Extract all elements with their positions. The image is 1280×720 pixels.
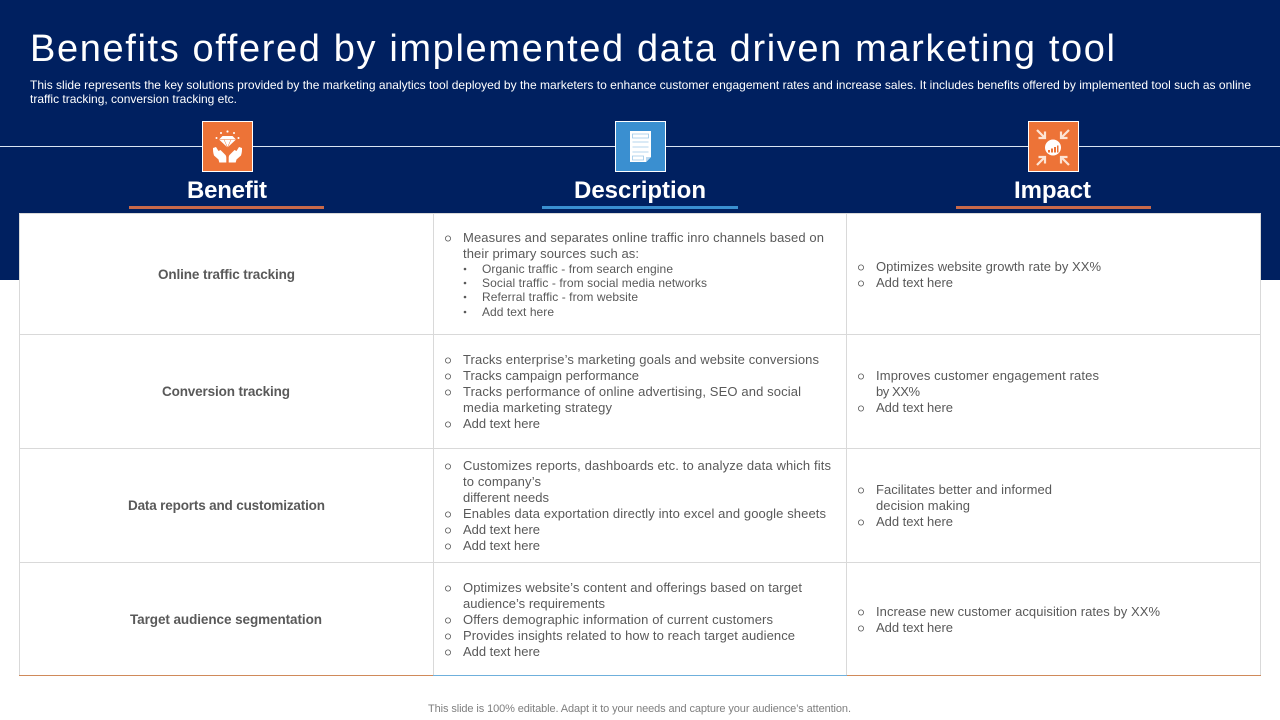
row 3: Data reports and customization: [128, 458, 1052, 553]
description list: Tracks performance of online advertising, SEO and social: [463, 384, 801, 399]
description list: Tracks campaign performance: [463, 368, 639, 383]
description list: Organic traffic - from search engine: [482, 262, 673, 276]
description list: [445, 352, 820, 431]
benefit label: Data reports and customization: [128, 498, 325, 513]
description list: Enables data exportation directly into excel and google sheets: [463, 506, 826, 521]
subtitle text block: This slide represents the key solutions provided by the marketing analytics tool deployed by the marketers to enhance customer engagement rates and increase sales. It includes benefits offered by implemented tool such as online: [30, 78, 1251, 92]
impact list: Improves customer engagement rates: [876, 368, 1100, 383]
icon: hands holding diamond: [202, 122, 252, 172]
column header: Impact: [956, 122, 1151, 209]
title: Benefits offered by implemented data driven marketing tool: [30, 28, 1115, 70]
description list: Add text here: [463, 538, 540, 553]
description list: Referral traffic - from website: [482, 290, 638, 304]
impact list: decision making: [876, 498, 970, 513]
benefit label: Target audience segmentation: [130, 612, 322, 627]
heading: Benefit: Benefit: [187, 177, 267, 204]
description list: [445, 580, 802, 659]
impact list: Optimizes website growth rate by XX%: [876, 259, 1101, 274]
description list: Optimizes website’s content and offerings based on target: [463, 580, 802, 595]
subtitle text block: traffic tracking, conversion tracking etc.: [30, 92, 237, 106]
impact list: Facilitates better and informed: [876, 482, 1052, 497]
icon: arrows converging on growth chart: [1028, 122, 1078, 172]
benefit label: Conversion tracking: [162, 384, 290, 399]
underline: Impact: [956, 206, 1151, 209]
description list: their primary sources such as:: [463, 246, 639, 261]
row 1: Online traffic tracking: [158, 230, 1101, 319]
impact list: [858, 482, 1052, 529]
description list: Add text here: [482, 305, 554, 319]
description list: media marketing strategy: [463, 400, 612, 415]
subtitle text block: [30, 78, 1251, 106]
benefit label: Online traffic tracking: [158, 267, 295, 282]
impact list: [858, 259, 1101, 290]
description list: [445, 230, 824, 319]
heading: Impact: Impact: [1014, 177, 1091, 204]
description list: Social traffic - from social media networks: [482, 276, 707, 290]
footer note: This slide is 100% editable. Adapt it to your needs and capture your audience’s attention.: [428, 703, 851, 715]
description list: to company’s: [463, 474, 542, 489]
description list: Customizes reports, dashboards etc. to analyze data which fits: [463, 458, 832, 473]
impact list: Add text here: [876, 275, 953, 290]
description list: Provides insights related to how to reach target audience: [463, 628, 795, 643]
description list: audience’s requirements: [463, 596, 606, 611]
row 2: Conversion tracking: [162, 352, 1100, 431]
description list: Add text here: [463, 416, 540, 431]
row 4: Target audience segmentation: [130, 580, 1160, 659]
impact list: [858, 368, 1100, 415]
underline: Description: [542, 206, 738, 209]
icon: document: [616, 122, 666, 172]
description list: different needs: [463, 490, 550, 505]
description list: [445, 458, 832, 553]
table panel: [19, 214, 1261, 676]
description list: Add text here: [463, 522, 540, 537]
description list: Offers demographic information of current customers: [463, 612, 774, 627]
impact list: Add text here: [876, 514, 953, 529]
description list: Tracks enterprise’s marketing goals and website conversions: [463, 352, 820, 367]
column header: Benefit: [129, 122, 324, 209]
header background band: [0, 0, 1280, 280]
description list: Measures and separates online traffic inro channels based on: [463, 230, 824, 245]
impact list: by XX%: [876, 384, 920, 399]
impact list: Increase new customer acquisition rates by XX%: [876, 604, 1160, 619]
underline: Benefit: [129, 206, 324, 209]
description list: Add text here: [463, 644, 540, 659]
column header: Description: [542, 122, 738, 209]
impact list: Add text here: [876, 400, 953, 415]
heading: Description: Description: [574, 177, 706, 204]
impact list: Add text here: [876, 620, 953, 635]
impact list: [858, 604, 1160, 635]
